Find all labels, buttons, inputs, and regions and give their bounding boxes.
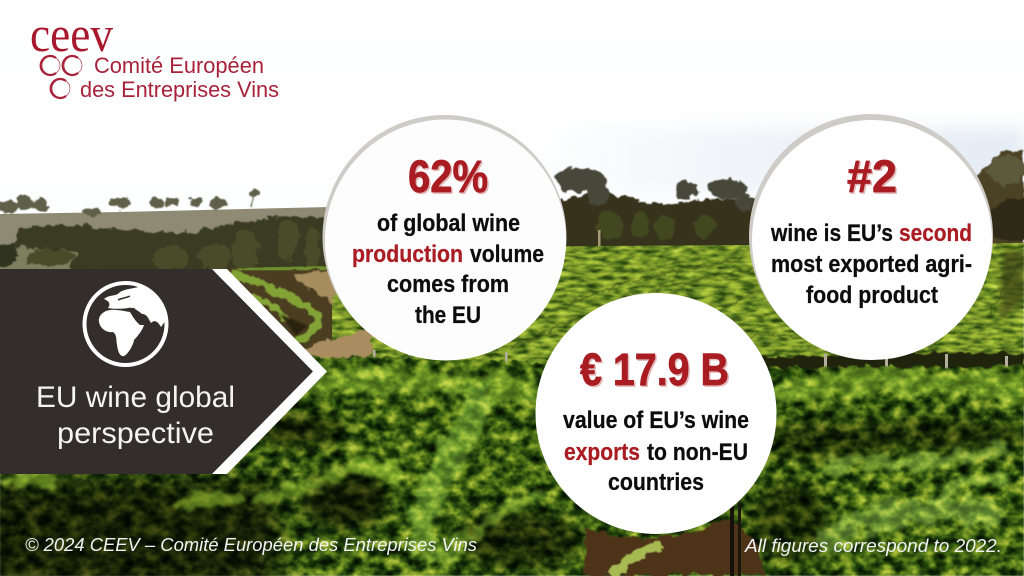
logo: CEEV: [30, 6, 279, 102]
left serpentine rows and track: [228, 266, 374, 360]
mid field vine rows: [228, 243, 1024, 376]
footer: data note: All figures correspond to 2022.: [744, 536, 1002, 556]
heading: EU wine global: [36, 381, 235, 414]
logo: CEEV: ceev: [30, 6, 113, 62]
stat value: € 17.9 B: [580, 344, 729, 395]
stat description: countries: [608, 469, 704, 496]
stat value: #2: [848, 152, 898, 204]
stat description: food product: [806, 282, 938, 309]
stat description: production: [352, 241, 463, 268]
heading: perspective: [57, 417, 214, 450]
panel: stat #2: [749, 114, 993, 360]
bright foliage sprays: [8, 379, 1024, 558]
panel: stat 17.9 B: [536, 293, 776, 534]
stat value: #2: [847, 151, 897, 202]
broad shading of the foreground: [0, 412, 1024, 576]
stat description: exports: [564, 439, 640, 466]
soil patch: [585, 518, 765, 576]
stat description: wine is EU’s: [770, 220, 893, 247]
stat value: 62%: [408, 151, 488, 202]
stat description: volume: [470, 241, 544, 268]
stat value: 62%: [410, 152, 490, 204]
right tree line: [974, 150, 1024, 246]
foreground vines: [0, 340, 1024, 576]
heading: [36, 381, 235, 450]
stat description: comes from: [387, 271, 509, 298]
stat value: € 17.9 B: [582, 346, 730, 396]
background: vineyard photograph: [0, 124, 1024, 576]
footer: copyright: © 2024 CEEV – Comité Européen des Entreprises Vins: [25, 535, 477, 555]
stat description: [563, 407, 749, 496]
logo: CEEV: Comité Européen: [94, 53, 264, 78]
stat description: [770, 220, 972, 309]
stat description: [352, 210, 544, 329]
panel: stat 62%: [322, 115, 566, 360]
left distant hills and trees: [0, 190, 330, 272]
stat description: the EU: [415, 302, 481, 329]
logo: grape circles: [41, 56, 82, 98]
panel: section arrow: [0, 269, 327, 474]
stat description: most exported agri-: [771, 251, 972, 278]
central tree line: [555, 168, 760, 252]
stat description: of global wine: [377, 210, 520, 237]
icon: globe: [84, 283, 166, 365]
stat description: second: [899, 220, 972, 247]
stat description: value of EU’s wine: [563, 407, 749, 434]
shadow along row ends: [762, 350, 1024, 374]
logo: CEEV: des Entreprises Vins: [80, 77, 279, 102]
stat description: to non-EU: [647, 439, 748, 466]
